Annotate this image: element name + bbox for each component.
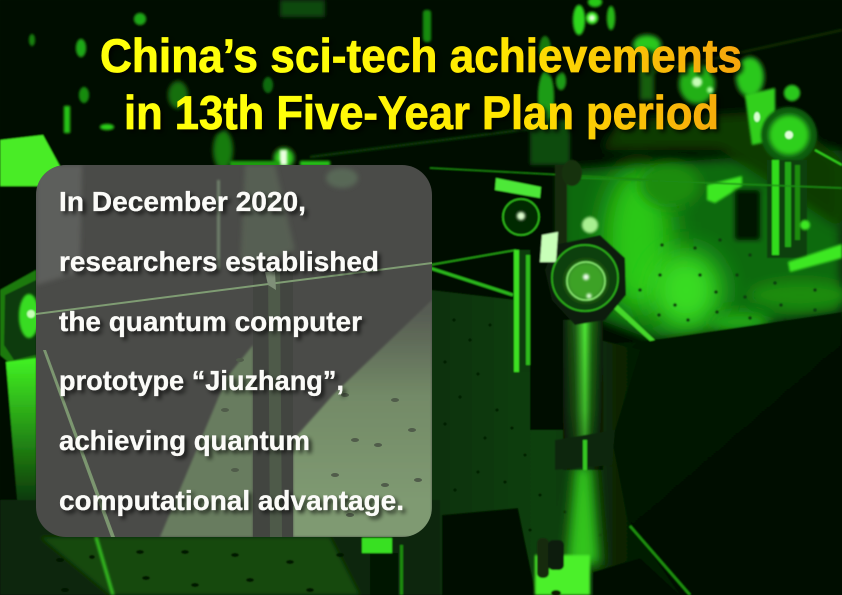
title shadow: in 13th Five-Year Plan period <box>127 89 722 142</box>
text shadow: In December 2020, <box>62 189 309 220</box>
bottom-left table, below panel <box>0 500 440 595</box>
panel: translucent description card <box>36 165 432 537</box>
lower table surface <box>430 290 680 595</box>
text shadow: prototype “Jiuzhang”, <box>62 368 347 399</box>
text shadow: the quantum computer <box>62 309 365 340</box>
small lens on dark mount <box>495 178 541 235</box>
panel text: researchers established <box>59 246 379 277</box>
text shadow: computational advantage. <box>62 488 407 519</box>
title shadow: China’s sci-tech achievements <box>103 32 745 85</box>
text shadow: researchers established <box>62 249 382 280</box>
title shadow <box>103 32 745 142</box>
title <box>100 29 742 139</box>
text shadow: achieving quantum <box>62 428 313 459</box>
text shadow <box>62 189 407 519</box>
title: China’s sci-tech achievements <box>100 29 742 82</box>
bottom objects <box>442 508 680 595</box>
panel text: the quantum computer <box>59 306 362 337</box>
optical posts <box>514 160 615 470</box>
panel text: In December 2020, <box>59 186 306 217</box>
top glowing components <box>29 0 842 170</box>
right glowing mounts and lens <box>530 35 842 272</box>
green glow: upper table <box>560 110 842 340</box>
laser beams <box>430 168 690 595</box>
main lens <box>540 217 626 325</box>
panel text: prototype “Jiuzhang”, <box>59 365 344 396</box>
dark instrument box, foreground right <box>600 312 842 595</box>
post reflection on table <box>566 465 600 565</box>
title: in 13th Five-Year Plan period <box>124 86 719 139</box>
left background: top bright strip and mount <box>0 135 330 510</box>
panel: see-through scene <box>36 165 432 537</box>
panel text: computational advantage. <box>59 485 404 516</box>
panel text <box>59 186 404 516</box>
panel text: achieving quantum <box>59 425 310 456</box>
table hole dots <box>608 238 817 322</box>
